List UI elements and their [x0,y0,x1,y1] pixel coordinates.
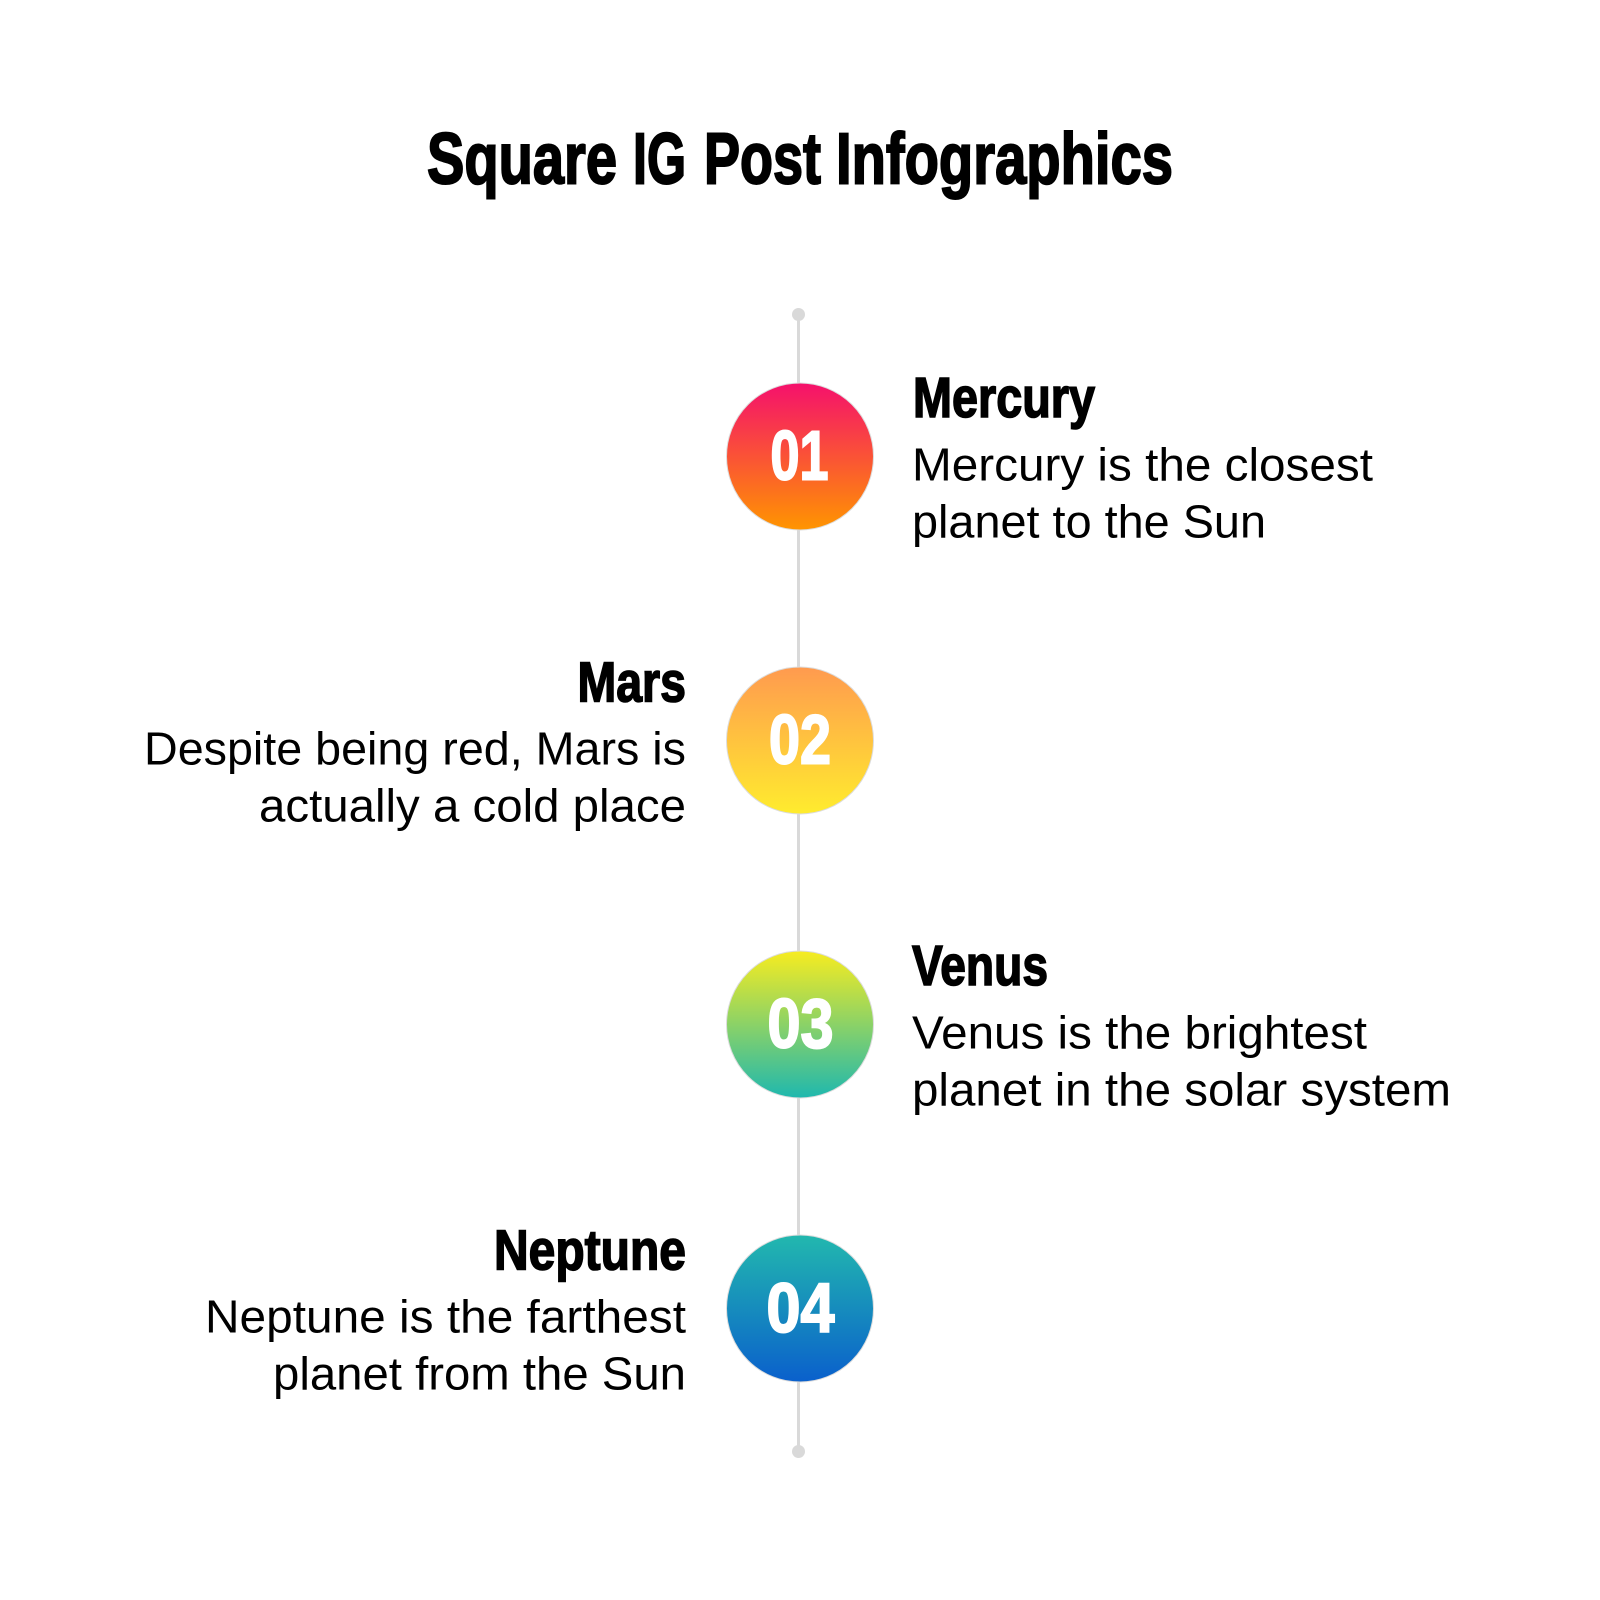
badge 04 [726,1235,874,1382]
badge 04: 04 [766,1269,835,1347]
description: Neptune: planet from the Sun [273,1348,686,1400]
description: Neptune: Neptune is the farthest [205,1290,686,1342]
title: Post [704,120,821,200]
step 03: Venus [726,934,1451,1116]
badge 03 [726,951,874,1098]
title [427,120,1173,200]
badge 02: 02 [769,700,831,778]
description: Mercury: Mercury is the closest [912,438,1373,490]
step 02: Mars [144,650,874,832]
badge 01: 01 [770,416,828,494]
heading: Mars: Mars [578,650,686,714]
description: Mars [144,722,686,832]
badge 01 [726,383,874,530]
description: Mercury: planet to the Sun [912,496,1266,548]
step 01: Mercury [726,366,1373,548]
description: Mars: Despite being red, Mars is [144,722,686,774]
description: Venus [912,1006,1451,1116]
description: Mercury [912,438,1373,548]
description: Mars: actually a cold place [259,780,686,832]
heading: Neptune: Neptune [494,1218,686,1282]
title: Square [427,120,617,200]
badge 03: 03 [768,984,834,1062]
badge 02 [726,667,874,814]
step 04: Neptune [205,1218,874,1400]
title: IG [633,120,686,200]
description: Venus: Venus is the brightest [912,1006,1367,1058]
title: Infographics [836,120,1173,200]
description: Venus: planet in the solar system [912,1064,1451,1116]
timeline axis [792,308,805,1458]
heading: Venus: Venus [912,934,1048,998]
heading: Mercury: Mercury [913,366,1095,430]
description: Neptune [205,1290,686,1400]
